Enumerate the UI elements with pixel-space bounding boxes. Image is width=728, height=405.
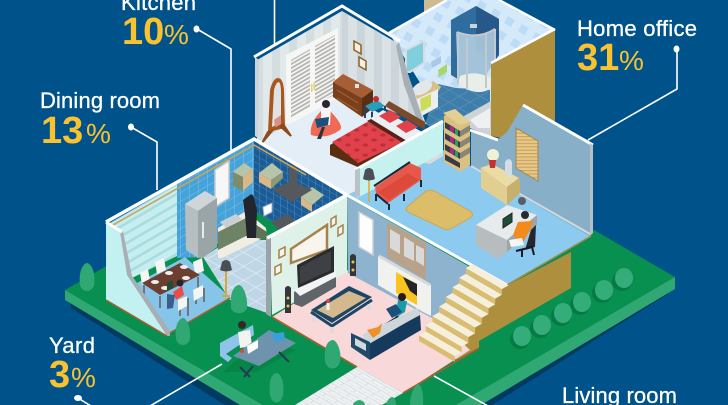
floor lamp — [363, 168, 375, 202]
outer wall gold — [491, 28, 555, 138]
label: yard: Yard — [49, 333, 95, 358]
label: kitchen: 10 — [122, 11, 164, 53]
label: yard: 3 — [49, 354, 70, 396]
window — [359, 212, 373, 255]
dresser — [333, 74, 373, 117]
dining table with chairs — [140, 258, 204, 316]
label: home office: % — [619, 45, 644, 76]
label: yard — [49, 333, 96, 396]
label: home office — [577, 16, 697, 79]
shower cabin — [456, 24, 495, 92]
label: dining room: Dining room — [40, 88, 160, 113]
picture frames — [275, 216, 343, 275]
woman on sofa — [383, 293, 407, 330]
window blind — [516, 128, 538, 181]
closet — [286, 28, 338, 124]
window — [215, 161, 229, 207]
label: yard: % — [71, 362, 96, 393]
label: dining room — [40, 88, 160, 152]
room: bathroom — [389, 0, 555, 138]
television — [297, 246, 334, 288]
room: bedroom — [254, 6, 430, 200]
woman cooking — [243, 194, 257, 238]
label: kitchen: % — [164, 19, 189, 50]
standing mirror — [262, 78, 291, 143]
rug — [406, 190, 472, 230]
floor lamp — [220, 260, 232, 296]
sofa — [351, 308, 421, 360]
fridge — [185, 191, 217, 258]
yard furniture — [220, 321, 296, 377]
outer gold wall below office — [456, 252, 571, 360]
range hood — [272, 165, 312, 202]
picture frames — [354, 41, 366, 70]
room: kitchen and dining — [106, 139, 347, 336]
bathtub — [463, 101, 491, 137]
bookshelf — [443, 109, 470, 172]
callout leader: dining room — [128, 124, 157, 190]
callout leader: top room — [274, 0, 276, 46]
fireplace — [378, 222, 431, 316]
red sofa — [374, 162, 421, 210]
label: home office: 31 — [577, 37, 619, 79]
bed — [330, 101, 425, 168]
person on beanbag — [311, 100, 341, 139]
mint side wall — [106, 223, 170, 336]
office right wall — [470, 105, 593, 236]
label: kitchen — [121, 0, 196, 53]
callout leader: living room — [434, 376, 488, 405]
callout leader: home office — [588, 46, 680, 140]
label: home office: Home office — [577, 16, 697, 41]
label: dining room: 13 — [41, 110, 83, 152]
cabinet with flowers — [480, 149, 520, 205]
cat — [367, 323, 382, 338]
room: living room — [266, 195, 470, 393]
office desk and worker — [476, 197, 537, 259]
speakers — [285, 254, 356, 313]
tv console — [294, 273, 336, 307]
hedge bushes — [510, 268, 633, 349]
room: home office — [347, 105, 593, 285]
ground platform — [65, 160, 675, 405]
callout leader: yard — [74, 364, 222, 405]
walkway — [295, 367, 403, 405]
coffee table — [311, 286, 372, 333]
label: dining room: % — [86, 118, 111, 149]
side table and lamp — [365, 96, 385, 120]
stairs — [419, 264, 509, 362]
trees — [80, 263, 423, 405]
wall cabinets — [233, 163, 324, 212]
callout leader: kitchen — [194, 26, 231, 150]
bathroom mirror and sink — [406, 41, 447, 117]
counters — [218, 203, 296, 258]
